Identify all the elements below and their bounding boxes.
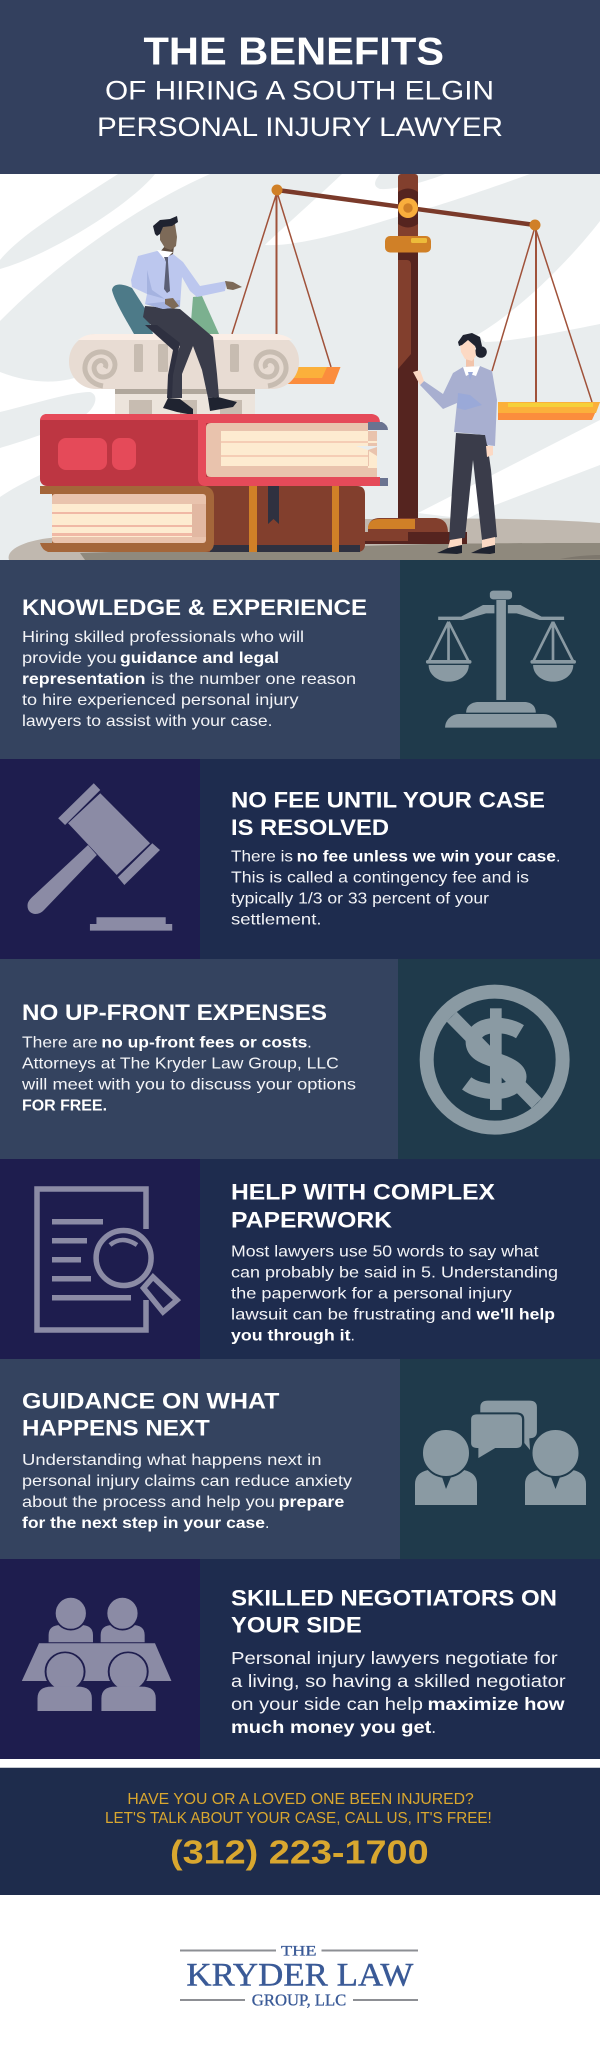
- body text: This is called a contingency fee and is: [231, 870, 529, 887]
- body text: .: [556, 849, 560, 866]
- body text: guidance and legal: [120, 650, 279, 667]
- body text: Attorneys at The Kryder Law Group, LLC: [22, 1056, 339, 1073]
- body text: no up-front fees or costs: [101, 1035, 307, 1052]
- body text: to hire experienced personal injury: [22, 692, 298, 709]
- heading: PAPERWORK: [231, 1207, 392, 1232]
- title: OF HIRING A SOUTH ELGIN: [105, 76, 494, 106]
- body text: can probably be said in 5. Understanding: [231, 1265, 558, 1282]
- body text: [22, 629, 356, 730]
- body text: is the number one reason: [151, 671, 356, 688]
- body text: .: [350, 1328, 355, 1345]
- heading: SKILLED NEGOTIATORS ON: [231, 1586, 557, 1611]
- woman standing: [413, 333, 497, 554]
- body text: maximize how: [428, 1694, 565, 1714]
- call to action text: LET'S TALK ABOUT YOUR CASE, CALL US, IT'S FREE!: [105, 1810, 492, 1827]
- body text: provide you: [22, 650, 117, 667]
- body text: .: [307, 1035, 312, 1052]
- body text: Most lawyers use 50 words to say what: [231, 1244, 539, 1261]
- illustration: lawyers with scales and books: [0, 174, 600, 560]
- panel: header: [0, 0, 600, 174]
- call to action text: [105, 1791, 492, 1827]
- body text: Personal injury lawyers negotiate for: [231, 1648, 558, 1668]
- heading: [231, 787, 545, 840]
- heading: KNOWLEDGE & EXPERIENCE: [22, 595, 367, 620]
- column capital: [69, 334, 299, 414]
- heading: HAPPENS NEXT: [22, 1416, 210, 1441]
- heading: GUIDANCE ON WHAT: [22, 1388, 280, 1413]
- panel: complex paperwork: [0, 1159, 600, 1359]
- man sitting: [131, 216, 242, 415]
- logo: The Kryder Law Group, LLC: KRYDER LAW: [186, 1958, 414, 1994]
- body text: settlement.: [231, 912, 322, 929]
- panel: no fee until resolved: [0, 759, 600, 959]
- body text: about the process and help you: [22, 1494, 275, 1511]
- body text: Hiring skilled professionals who will: [22, 629, 304, 646]
- body text: you through it: [231, 1328, 351, 1345]
- heading: [22, 1388, 280, 1441]
- phone number: (312) 223-1700: [170, 1833, 429, 1870]
- heading: NO FEE UNTIL YOUR CASE: [231, 787, 545, 812]
- body text: [231, 1648, 566, 1737]
- panel: knowledge and experience: [0, 560, 600, 759]
- heading: IS RESOLVED: [231, 815, 389, 840]
- body text: lawyers to assist with your case.: [22, 713, 272, 730]
- body text: much money you get: [231, 1717, 431, 1737]
- body text: will meet with you to discuss your options: [21, 1077, 356, 1094]
- icon: no dollar sign: [427, 992, 563, 1128]
- icon: gavel: [28, 783, 172, 931]
- logo: The Kryder Law Group, LLC: THE: [281, 1944, 316, 1960]
- heading: [231, 1586, 557, 1638]
- heading: [231, 1179, 495, 1232]
- chair shapes: [112, 284, 219, 334]
- title: PERSONAL INJURY LAWYER: [97, 112, 503, 142]
- body text: [231, 849, 560, 929]
- logo: The Kryder Law Group, LLC: GROUP, LLC: [252, 1991, 346, 2010]
- logo: The Kryder Law Group, LLC: [180, 1944, 418, 2010]
- body text: There is: [231, 849, 293, 866]
- body text: personal injury claims can reduce anxiety: [22, 1473, 352, 1490]
- body text: typically 1/3 or 33 percent of your: [231, 891, 490, 908]
- title: THE BENEFITS: [144, 31, 444, 74]
- body text: no fee unless we win your case: [297, 849, 556, 866]
- heading: YOUR SIDE: [231, 1613, 362, 1638]
- title: [97, 31, 503, 142]
- body text: There are: [22, 1035, 98, 1052]
- body text: on your side can help: [231, 1694, 423, 1714]
- body text: for the next step in your case: [22, 1515, 265, 1532]
- body text: a living, so having a skilled negotiator: [231, 1671, 566, 1691]
- panel: no up-front expenses: [0, 959, 600, 1159]
- ground: [9, 518, 600, 560]
- panel: call to action: [0, 1767, 600, 1895]
- body text: the paperwork for a personal injury: [231, 1286, 512, 1303]
- body text: Understanding what happens next in: [22, 1452, 322, 1469]
- panel: guidance on what happens next: [0, 1359, 600, 1559]
- panel: skilled negotiators: [0, 1559, 600, 1759]
- stacked red book: [40, 414, 388, 486]
- icon: two people talking: [415, 1401, 586, 1505]
- body text: [21, 1035, 356, 1115]
- body text: [22, 1452, 352, 1532]
- body text: FOR FREE.: [22, 1098, 107, 1115]
- body text: representation: [22, 671, 146, 688]
- body text: we'll help: [475, 1307, 555, 1324]
- body text: .: [265, 1515, 269, 1532]
- icon: people around a table: [22, 1597, 171, 1711]
- body text: [231, 1244, 558, 1345]
- body text: lawsuit can be frustrating and: [231, 1307, 472, 1324]
- heading: NO UP-FRONT EXPENSES: [22, 1000, 327, 1025]
- icon: scales of justice: [426, 591, 576, 728]
- stacked brown book: [40, 486, 365, 552]
- body text: prepare: [279, 1494, 345, 1511]
- body text: .: [431, 1717, 436, 1737]
- call to action text: HAVE YOU OR A LOVED ONE BEEN INJURED?: [127, 1791, 474, 1808]
- large scale: [232, 174, 600, 544]
- icon: document with magnifier: [37, 1189, 177, 1330]
- heading: HELP WITH COMPLEX: [231, 1179, 495, 1204]
